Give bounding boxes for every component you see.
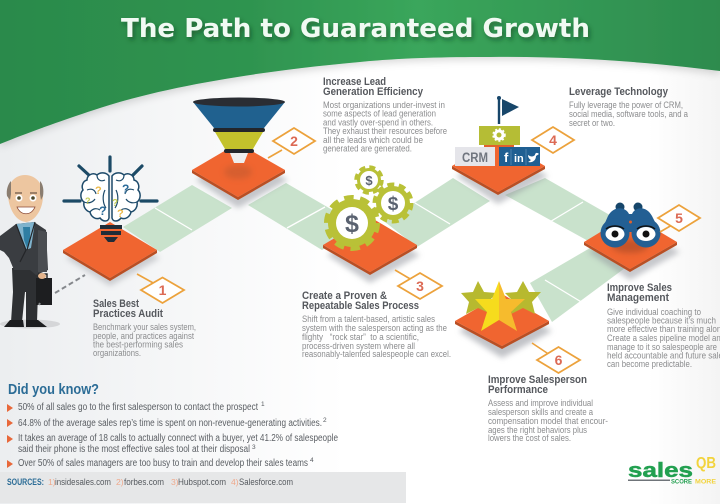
step 5 platform [584, 214, 680, 280]
step 2 number badge [268, 128, 315, 158]
step 3 platform [323, 217, 420, 283]
icon: binoculars [600, 202, 660, 248]
icon: dollar gears: $ [388, 194, 399, 215]
icon: lightbulb brain: ? [112, 198, 118, 209]
step 5 text: Give individual coaching to [607, 307, 701, 317]
step 4 text [569, 86, 688, 128]
step 6 text: compensation model that encour- [488, 416, 608, 426]
step 1 text: organizations. [93, 348, 141, 358]
step 4 text: Leverage Technology [569, 86, 669, 98]
title: The Path to Guaranteed Growth [121, 14, 590, 44]
step 4 text: social media, software tools, and a [569, 109, 688, 119]
step 3 text: reasonably-talented salespeople can excel. [302, 349, 451, 359]
icon: lightbulb brain: ? [95, 185, 102, 197]
step 2 number badge: 2 [290, 133, 298, 149]
step 3 text: process-driven system where all [302, 341, 415, 351]
step 5 number badge: 5 [675, 210, 683, 226]
SalesQB logo: QB [696, 455, 716, 472]
sources bar: 3) [171, 477, 179, 487]
step 4 number badge: 4 [549, 132, 557, 148]
step 6 text: Performance [488, 384, 548, 396]
sources bar [0, 472, 406, 503]
icon: technology stack with flag: f [504, 150, 509, 165]
step 2 platform [192, 143, 288, 208]
step 6 text: salesperson skills and create a [488, 407, 593, 417]
sources bar: Salesforce.com [239, 477, 293, 488]
step 5 text: Management [607, 292, 669, 304]
step 1 text: the best-performing sales [93, 340, 183, 350]
step 6 text: Improve Salesperson [488, 374, 587, 386]
SalesQB logo: MORE [695, 478, 717, 486]
icon: funnel [193, 98, 285, 163]
step 4 platform [452, 139, 548, 204]
step 2 text: some aspects of lead generation [323, 109, 436, 119]
sources bar: insidesales.com [55, 477, 111, 488]
step 5 number badge [658, 205, 700, 232]
step 3 text [302, 290, 451, 359]
step 6 platform [455, 294, 552, 358]
step 2 text: all the leads which could be [323, 135, 423, 145]
step 3 number badge [395, 270, 442, 299]
step 3 text: Repeatable Sales Process [302, 300, 419, 312]
step 5 text: Improve Sales [607, 282, 672, 294]
step 6 text: Assess and improve individual [488, 398, 593, 408]
step 3 text: Create a Proven & [302, 290, 387, 302]
step 2 text [323, 76, 447, 154]
icon: technology stack with flag [455, 96, 540, 166]
did you know heading: Did you know? [8, 382, 99, 398]
icon: lightbulb brain [64, 157, 157, 242]
path bands between steps [123, 178, 625, 322]
step 6 number badge: 6 [555, 352, 563, 368]
step 1 platform [63, 222, 160, 286]
icon: three stars [461, 281, 541, 331]
step 2 text: They exhaust their resources before [323, 126, 447, 136]
sources bar: 2) [116, 477, 124, 487]
did you know facts list: 3 [252, 444, 256, 451]
step 3 text: system with the salesperson acting as the [302, 323, 447, 333]
step 1 number badge [137, 274, 184, 303]
did you know facts list: Over 50% of sales managers are too busy to train and develop their sales teams [18, 458, 308, 469]
did you know facts list: said their phone is the most effective sales tool at their disposal [18, 444, 250, 455]
step 1 number badge: 1 [159, 282, 167, 298]
icon: technology stack with flag: in [514, 153, 524, 165]
step 5 text [607, 282, 720, 369]
step 2 text: and vastly over-spend in others. [323, 118, 433, 128]
icon: dollar gears [326, 167, 412, 248]
step 2 text: Increase Lead [323, 76, 386, 88]
step 5 text: can become predictable. [607, 359, 692, 369]
step 2 text: generated are generated. [323, 144, 412, 154]
did you know facts list: 64.8% of the average sales rep’s time is spent on non-revenue-generating activities. [18, 418, 322, 429]
step 1 text: people, and practices against [93, 331, 194, 341]
man with briefcase [0, 175, 60, 328]
did you know facts list [7, 401, 338, 469]
did you know facts list: 50% of all sales go to the first salesperson to contact the prospect [18, 402, 258, 413]
icon: lightbulb brain: ? [85, 196, 90, 206]
step 1 text: Benchmark your sales system, [93, 322, 196, 332]
step 1 text: Practices Audit [93, 308, 163, 320]
SalesQB logo [628, 455, 717, 486]
icon: lightbulb brain: ? [117, 208, 124, 220]
SalesQB logo: SCORE [671, 478, 693, 486]
step 4 text: secret or two. [569, 118, 615, 128]
sources bar: 4) [231, 477, 239, 487]
dashed connector from man to step 1 [39, 275, 85, 305]
step 2 text: Generation Efficiency [323, 86, 424, 98]
green header banner [0, 0, 720, 144]
did you know facts list: 2 [323, 417, 327, 424]
did you know facts list: 1 [261, 401, 265, 408]
sources bar: SOURCES: [7, 477, 44, 487]
icon: lightbulb brain: ? [99, 204, 106, 218]
step 1 text: Sales Best [93, 298, 139, 310]
did you know facts list: It takes an average of 18 calls to actually connect with a buyer, yet 41.2% of salespeople [18, 433, 338, 444]
sources bar: 1) [48, 477, 56, 487]
step 6 text: lowers the cost of sales. [488, 433, 571, 443]
step 1 text [93, 298, 196, 358]
did you know facts list: 4 [310, 457, 314, 464]
icon: dollar gears: $ [345, 210, 359, 238]
step 2 text: Most organizations under-invest in [323, 100, 445, 110]
step 6 number badge [532, 343, 580, 373]
step 4 text: Fully leverage the power of CRM, [569, 100, 683, 110]
step 3 number badge: 3 [416, 278, 424, 294]
icon: dollar gears: $ [365, 173, 373, 188]
step 6 text [488, 374, 608, 443]
icon: technology stack with flag: CRM [462, 150, 488, 165]
step 3 text: Shift from a talent-based, artistic sales [302, 314, 435, 324]
sources bar: forbes.com [124, 477, 164, 488]
sources bar: Hubspot.com [178, 477, 226, 488]
step 3 text: flighty “rock star” to a scientific, [302, 332, 419, 342]
icon: lightbulb brain: ? [122, 182, 129, 196]
step 4 number badge [532, 127, 574, 153]
step 6 text: ages the right behaviors plus [488, 425, 587, 435]
SalesQB logo: sales [628, 460, 693, 482]
